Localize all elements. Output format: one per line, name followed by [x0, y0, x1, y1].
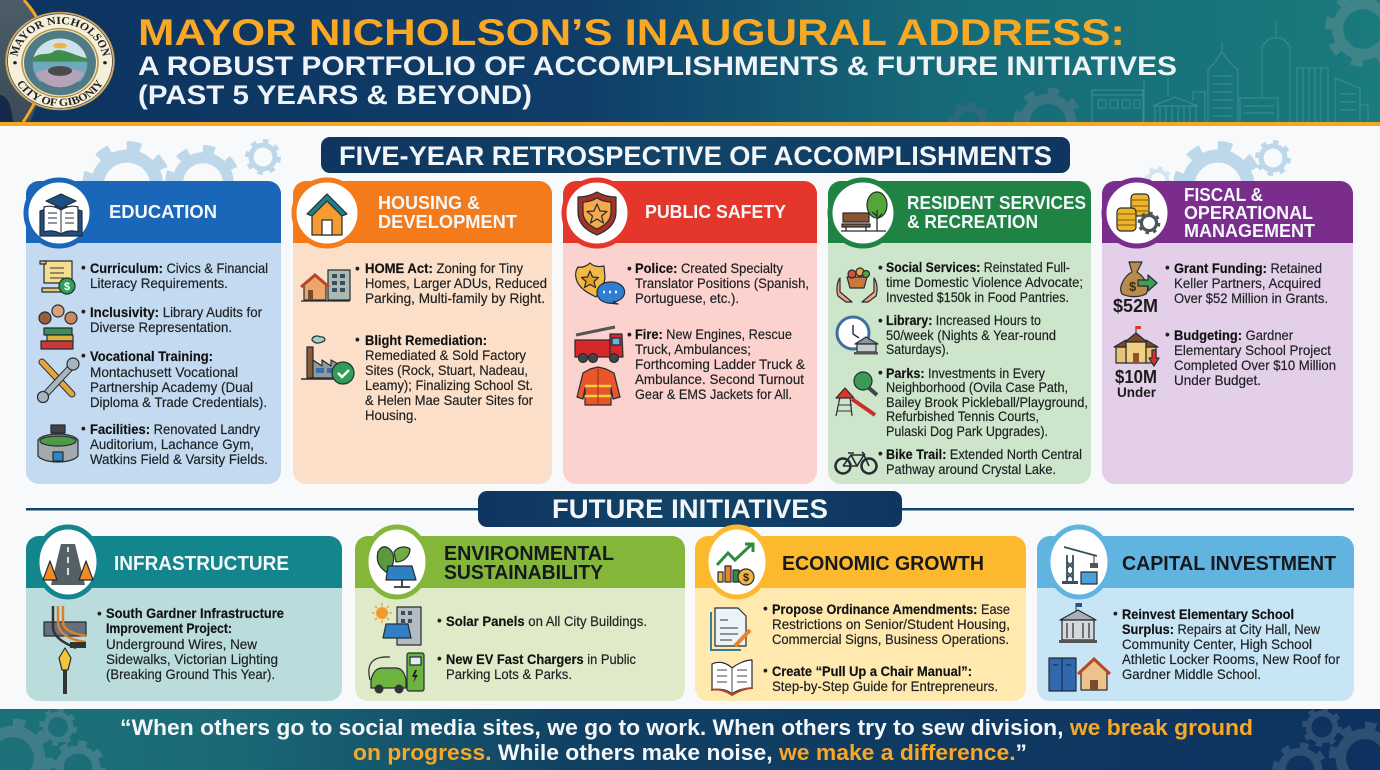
text: reinvest elementary school surplus: Surplus: Repairs at City Hall, New [1122, 622, 1320, 637]
heading: EDUCATION [109, 201, 217, 222]
text: parks: Bailey Brook Pickleball/Playground, [886, 395, 1088, 410]
text: fire: Ambulance. Second Turnout [635, 372, 804, 387]
text: south gardner project [97, 606, 284, 682]
text: library: Saturdays). [886, 342, 949, 357]
icon: EV charger and car [369, 653, 424, 694]
quote text [120, 715, 1253, 765]
heading [378, 192, 518, 232]
heading: DEVELOPMENT [378, 211, 518, 232]
text: blight remediation [355, 332, 533, 423]
text: south gardner project: South Gardner Infrastructure [106, 606, 284, 621]
icon: money bag with arrow and $52M [1113, 262, 1158, 316]
text: parks: Neighborhood (Ovila Case Path, [886, 380, 1068, 395]
text: ordinance amendments: Commercial Signs, Business Operations. [772, 632, 1009, 647]
header banner [0, 0, 1380, 122]
heading [444, 543, 614, 584]
text: parks: Parks: Investments in Every [886, 366, 1045, 381]
icon: lockers and school [1049, 658, 1110, 691]
text: library: 50/week (Nights & Year-round [886, 328, 1056, 343]
icon: road with cones [37, 527, 99, 597]
icon: city hall [1059, 603, 1097, 643]
text: library: • [878, 313, 883, 328]
text: blight remediation: Housing. [365, 408, 417, 423]
icon: people and books [39, 305, 77, 349]
icon: money bag with arrow and $52M: $52M [1113, 296, 1158, 316]
text: reinvest elementary school surplus: Reinvest Elementary School [1122, 607, 1294, 622]
text: social services: Invested $150k in Food Pantries. [886, 290, 1069, 305]
text: police: Portuguese, etc.). [635, 291, 739, 306]
title: MAYOR NICHOLSON’S INAUGURAL ADDRESS: [138, 12, 1125, 53]
icon: sun, building and solar panel [372, 603, 421, 645]
panel: public safety [563, 180, 817, 484]
icon: construction crane [1048, 527, 1110, 597]
icon: underground wires [44, 606, 86, 648]
text: south gardner project: Underground Wires, New [106, 637, 257, 652]
icon: diploma scroll with dollar: $ [64, 281, 70, 293]
heading: INFRASTRUCTURE [114, 553, 289, 575]
panel: education [26, 180, 281, 484]
icon: bicycle [836, 452, 876, 474]
text: fire: Truck, Ambulances; [635, 342, 751, 357]
icon: school with down arrow and $10M under [1114, 326, 1159, 400]
icon: wrench and screwdriver [38, 358, 79, 402]
text: bike trail: Pathway around Crystal Lake. [886, 462, 1056, 477]
heading: PUBLIC SAFETY [645, 201, 787, 222]
gold header rule [0, 122, 1380, 126]
text: parks: Pulaski Dog Park Upgrades). [886, 424, 1048, 439]
heading: ECONOMIC GROWTH [782, 553, 984, 575]
text: ordinance amendments: • [763, 601, 768, 616]
panel: fiscal and operational management [1102, 180, 1353, 484]
city seal [5, 12, 115, 110]
divider line [26, 508, 1354, 510]
text: ordinance amendments: Restrictions on Senior/Student Housing, [772, 617, 1010, 632]
text: south gardner project: Sidewalks, Victorian Lighting [106, 652, 278, 667]
text: pull up a chair manual [763, 663, 998, 694]
text: social services: time Domestic Violence Advocate; [886, 275, 1083, 290]
text: grant funding: • [1165, 260, 1170, 275]
icon: stadium [38, 425, 78, 462]
text: blight remediation: Leamy); Finalizing School St. [365, 378, 533, 393]
icon: clock and library [837, 317, 878, 354]
text: vocational training: Partnership Academy (Dual [90, 380, 253, 395]
text: curriculum: Literacy Requirements. [90, 276, 228, 291]
title: (PAST 5 YEARS & BEYOND) [138, 80, 532, 110]
heading: & RECREATION [907, 211, 1038, 232]
text: library [878, 313, 1056, 357]
text: reinvest elementary school surplus: Community Center, High School [1122, 637, 1312, 652]
text: home act: • [355, 261, 360, 276]
title [138, 12, 1177, 110]
text: curriculum: • [81, 260, 86, 275]
text: budgeting: Completed Over $10 Million [1174, 358, 1336, 373]
text: EV fast chargers [437, 651, 636, 682]
text: vocational training: • [81, 348, 86, 363]
icon: factory with check [301, 336, 354, 384]
text: pull up a chair manual: Step-by-Step Guide for Entrepreneurs. [772, 679, 998, 694]
icon: victorian street lamp [59, 648, 71, 694]
text: vocational training: Montachusett Vocational [90, 365, 238, 380]
icon: diploma scroll with dollar [40, 261, 75, 294]
icon: school with down arrow and $10M under: Under [1117, 385, 1157, 400]
text: fire: Gear & EMS Jackets for All. [635, 387, 792, 402]
text: reinvest elementary school surplus: Athletic Locker Rooms, New Roof for [1122, 652, 1340, 667]
heading: ENVIRONMENTAL [444, 543, 614, 565]
icon: turnout jacket [577, 367, 620, 405]
quote text: on progress. While others make noise, we make a difference. ” [353, 740, 1027, 765]
icon: money bag with arrow and $52M: $ [1129, 279, 1137, 294]
text: pull up a chair manual: • [763, 663, 768, 678]
text: south gardner project: • [97, 606, 102, 621]
text: grant funding [1165, 260, 1328, 306]
icon: chart and coin [706, 527, 768, 597]
text: inclusivity [81, 304, 262, 335]
text: ordinance amendments: Propose Ordinance Amendments: Ease [772, 602, 1010, 617]
heading: HOUSING & [378, 192, 480, 213]
text: fire: Fire: New Engines, Rescue [635, 327, 792, 342]
background gears [88, 141, 1289, 225]
text: parks: Refurbished Tennis Courts, [886, 409, 1039, 424]
heading: CAPITAL INVESTMENT [1122, 553, 1336, 575]
text: facilities: Facilities: Renovated Landry [90, 422, 260, 437]
text: EV fast chargers: • [437, 651, 442, 666]
text: home act: Parking, Multi-family by Right. [365, 291, 545, 306]
heading [1184, 184, 1316, 241]
text: parks: • [878, 365, 883, 380]
heading: FISCAL & [1184, 184, 1263, 205]
text: reinvest elementary school surplus [1113, 606, 1340, 682]
text: budgeting: Under Budget. [1174, 373, 1261, 388]
panel: infrastructure [26, 527, 342, 701]
section heading: future initiatives [478, 491, 902, 527]
text: budgeting: Elementary School Project [1174, 343, 1331, 358]
text: fire: Forthcoming Ladder Truck & [635, 357, 805, 372]
heading: SUSTAINABILITY [444, 562, 604, 584]
text: vocational training [81, 348, 267, 410]
text: facilities: Watkins Field & Varsity Fields. [90, 452, 268, 467]
icon: house [294, 180, 360, 246]
text: bike trail [878, 446, 1082, 477]
text: inclusivity: Diverse Representation. [90, 320, 232, 335]
icon: police badge and speech bubble [576, 263, 625, 304]
text: vocational training: Vocational Training: [90, 349, 213, 364]
icon: open book with graduation cap [26, 180, 92, 246]
text: bike trail: Bike Trail: Extended North Central [886, 447, 1082, 462]
city seal: CITY OF GIBONIY [18, 80, 102, 106]
panel: capital investment [1037, 527, 1354, 701]
text: police [627, 261, 809, 306]
icon: chart and coin: $ [743, 572, 749, 584]
panel: environmental sustainability [355, 527, 685, 701]
text: curriculum: Curriculum: Civics & Financial [90, 261, 268, 276]
text: solar panels: • [437, 613, 442, 628]
text: home act [355, 261, 547, 306]
text: parks [878, 365, 1088, 439]
icon: coins and gear [1104, 180, 1170, 246]
text: inclusivity: Inclusivity: Library Audits for [90, 305, 262, 320]
text: ordinance amendments [763, 601, 1010, 647]
city seal: MAYOR NICHOLSON [10, 16, 110, 57]
text: vocational training: Diploma & Trade Credentials). [90, 395, 267, 410]
text: inclusivity: • [81, 304, 86, 319]
text: solar panels: Solar Panels on All City Buildings. [446, 614, 647, 629]
quote text: “When others go to social media sites, we go to work. When others try to sew division, we break ground [120, 715, 1253, 740]
text: budgeting [1165, 327, 1336, 388]
section heading: five-year retrospective: FIVE-YEAR RETROSPECTIVE OF ACCOMPLISHMENTS [339, 141, 1052, 171]
text: fire: • [627, 327, 632, 342]
text: blight remediation: & Helen Mae Sauter Sites for [365, 393, 533, 408]
text: grant funding: Keller Partners, Acquired [1174, 276, 1321, 291]
text: pull up a chair manual: Create “Pull Up a Chair Manual”: [772, 664, 972, 679]
section heading: future initiatives: FUTURE INITIATIVES [552, 494, 828, 524]
text: home act: Homes, Larger ADUs, Reduced [365, 276, 547, 291]
text: home act: HOME Act: Zoning for Tiny [365, 261, 523, 276]
icon: house and apartment building [301, 270, 350, 301]
text: budgeting: Budgeting: Gardner [1174, 328, 1293, 343]
icon: playground and pickleball paddle [836, 372, 877, 416]
text: blight remediation: Blight Remediation: [365, 333, 487, 348]
text: social services: • [878, 260, 883, 275]
icon: hands with basket [837, 268, 877, 302]
text: reinvest elementary school surplus: • [1113, 606, 1118, 621]
text: EV fast chargers: Parking Lots & Parks. [446, 667, 572, 682]
text: grant funding: Grant Funding: Retained [1174, 261, 1322, 276]
title: A ROBUST PORTFOLIO OF ACCOMPLISHMENTS & FUTURE INITIATIVES [138, 51, 1177, 81]
skyline and gears decoration [948, 0, 1380, 122]
text: curriculum [81, 260, 268, 291]
gold arc [23, 0, 38, 122]
footer quote banner [0, 709, 1380, 770]
mayor portrait edge [0, 0, 45, 122]
icon: bench and tree [830, 180, 896, 246]
text: social services: Social Services: Reinstated Full- [886, 260, 1070, 275]
text: blight remediation: Remediated & Sold Factory [365, 348, 526, 363]
panel: economic growth [695, 527, 1026, 701]
text: facilities: Auditorium, Lachance Gym, [90, 437, 254, 452]
text: bike trail: • [878, 446, 883, 461]
icon: fire truck [575, 327, 623, 362]
text: fire [627, 327, 805, 402]
heading: OPERATIONAL [1184, 202, 1313, 223]
heading: MANAGEMENT [1184, 220, 1316, 241]
text: blight remediation: • [355, 332, 360, 347]
text: police: Translator Positions (Spanish, [635, 276, 809, 291]
icon: leaves and solar panel [366, 527, 428, 597]
text: budgeting: • [1165, 327, 1170, 342]
text: library: Library: Increased Hours to [886, 313, 1041, 328]
text: police: • [627, 261, 632, 276]
panel: housing and development [293, 180, 552, 484]
text: reinvest elementary school surplus: Gardner Middle School. [1122, 667, 1261, 682]
heading: RESIDENT SERVICES [907, 192, 1086, 213]
text: social services [878, 260, 1083, 305]
icon: school with down arrow and $10M under: $10M [1115, 367, 1157, 387]
icon: open manual [711, 660, 753, 695]
footer gears [0, 710, 1380, 770]
text: facilities [81, 421, 268, 467]
text: blight remediation: Sites (Rock, Stuart, Nadeau, [365, 363, 528, 378]
icon: shield with star [564, 180, 630, 246]
panel: resident services and recreation [828, 180, 1091, 484]
heading [907, 192, 1086, 232]
text: south gardner project: (Breaking Ground This Year). [106, 667, 275, 682]
text: facilities: • [81, 421, 86, 436]
text: grant funding: Over $52 Million in Grants. [1174, 291, 1328, 306]
text: south gardner project: Improvement Project: [106, 621, 232, 636]
text: EV fast chargers: New EV Fast Chargers in Public [446, 652, 636, 667]
text: police: Police: Created Specialty [635, 261, 783, 276]
icon: document with pen [711, 608, 750, 650]
